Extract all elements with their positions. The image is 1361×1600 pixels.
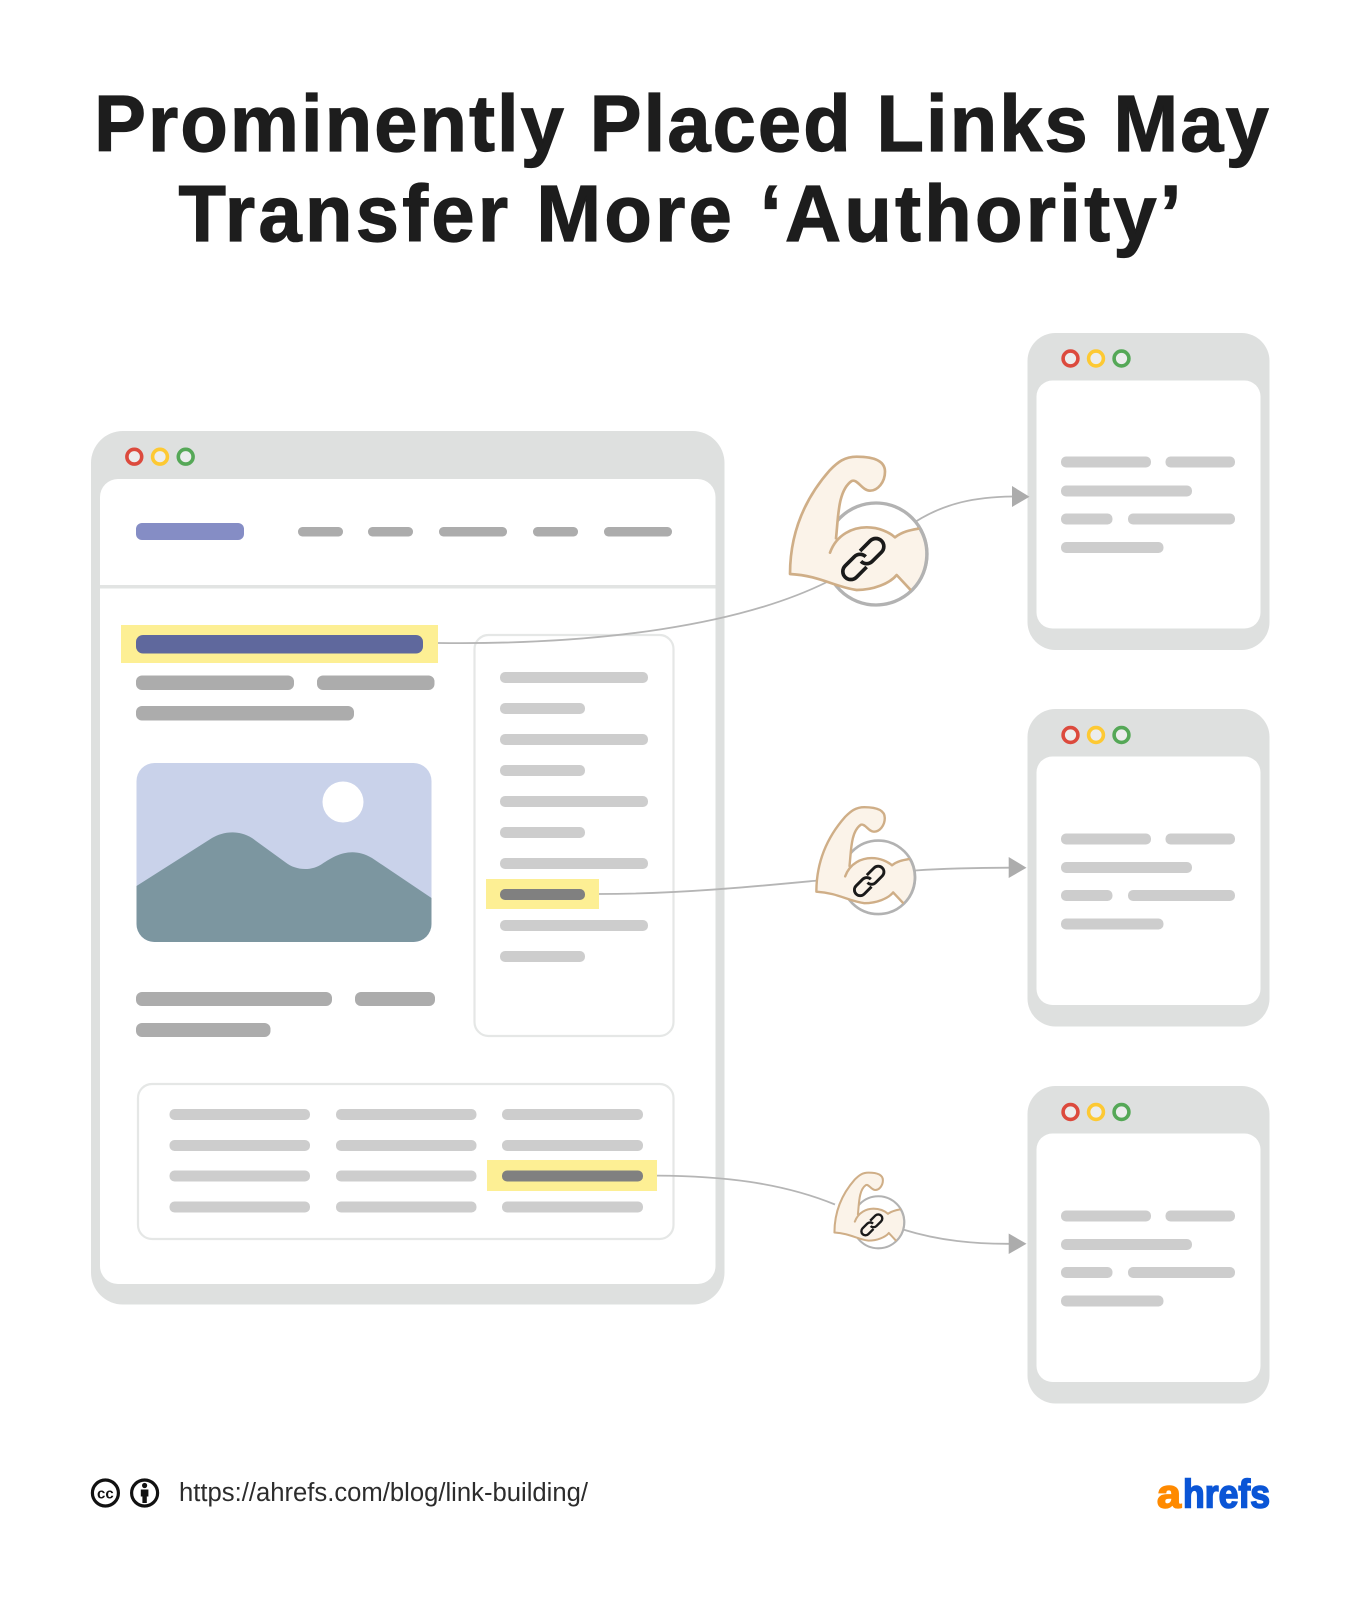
panel: main web page browser window	[91, 431, 724, 1304]
icon: creative commons: cc	[97, 1486, 114, 1502]
text lines under headline	[136, 676, 434, 720]
icon: creative commons	[92, 1480, 118, 1506]
image placeholder: mountains and sun	[136, 763, 432, 942]
panel: target page 3	[1028, 1086, 1270, 1404]
sidebar box	[474, 635, 674, 1036]
window control dots	[127, 449, 193, 464]
source url: https://ahrefs.com/blog/link-building/	[179, 1479, 589, 1507]
highlighted headline link	[121, 625, 438, 663]
title: Prominently Placed Links May	[94, 79, 1269, 168]
ahrefs logo: hrefs	[1183, 1472, 1270, 1516]
arrow: top link to target page 1	[438, 486, 1030, 643]
highlighted sidebar link	[486, 879, 599, 909]
icon: small flexed arm with link	[834, 1173, 904, 1248]
highlighted footer link	[487, 1160, 657, 1191]
title	[94, 79, 1269, 258]
arrow: footer link to target page 3	[657, 1176, 1026, 1254]
icon: attribution person	[132, 1480, 158, 1506]
navigation menu	[298, 527, 672, 536]
text lines under image	[136, 992, 435, 1037]
footer links box	[138, 1084, 674, 1239]
arrow: sidebar link to target page 2	[599, 857, 1026, 894]
ahrefs logo: a	[1157, 1472, 1182, 1516]
site logo bar	[136, 523, 244, 540]
panel: target page 2	[1028, 709, 1270, 1026]
icon: medium flexed arm with link	[816, 807, 915, 914]
icon: large flexed arm with link	[790, 457, 927, 605]
panel: target page 1	[1028, 333, 1270, 650]
title: Transfer More ‘Authority’	[178, 169, 1181, 258]
